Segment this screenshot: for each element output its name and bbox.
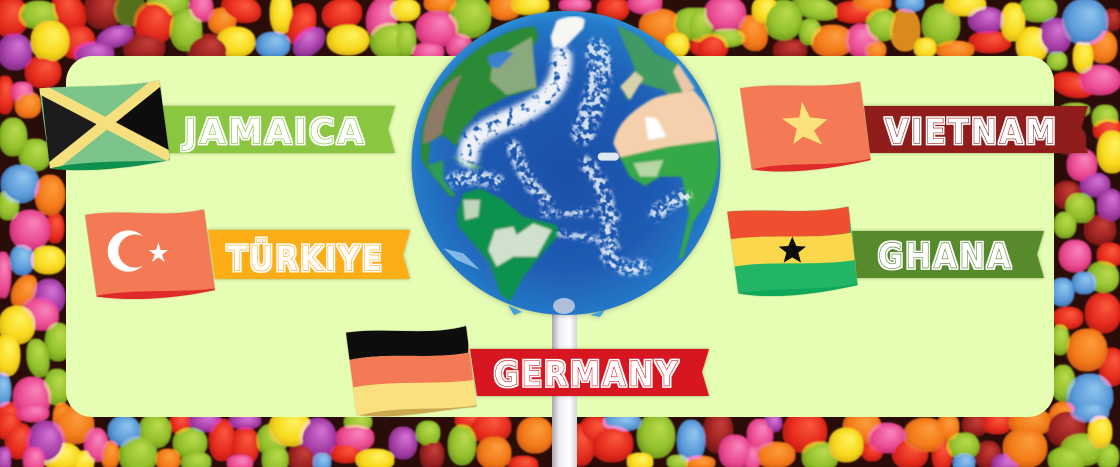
drips under the globe [508, 305, 605, 317]
flag: Turkiye [85, 209, 217, 303]
label: Ghana [727, 207, 1044, 303]
label: Turkiye [85, 209, 410, 303]
label: Germany [343, 323, 709, 420]
icon: lollipop stick [552, 300, 577, 467]
stick collar [553, 298, 575, 314]
flag: Jamaica [39, 81, 173, 175]
ribbon: Vietnam [864, 106, 1088, 153]
country name: TÜRKIYE: TÜRKIYE [227, 238, 384, 280]
country name: JAMAICA: JAMAICA [182, 112, 366, 152]
label: Vietnam [740, 82, 1088, 177]
country name: GHANA: GHANA [878, 237, 1013, 277]
ribbon: Jamaica [163, 106, 395, 153]
ribbon: Ghana [852, 231, 1044, 278]
flag: Vietnam [740, 82, 872, 177]
flag: Germany [343, 323, 478, 420]
country name: VIETNAM: VIETNAM [885, 112, 1058, 152]
country name: GERMANY: GERMANY [494, 355, 680, 395]
icon: black star [779, 237, 806, 263]
ribbon: Germany [470, 349, 709, 396]
flag: Ghana [727, 207, 858, 303]
icon: lollipop globe [412, 11, 720, 317]
land masses [421, 16, 719, 302]
panel: pale green background [66, 56, 1054, 417]
ice reflection [443, 248, 480, 270]
clouds over the Atlantic [453, 50, 685, 268]
label: Jamaica [39, 81, 395, 175]
icon: star [782, 102, 827, 145]
ribbon: Turkiye [208, 230, 410, 279]
